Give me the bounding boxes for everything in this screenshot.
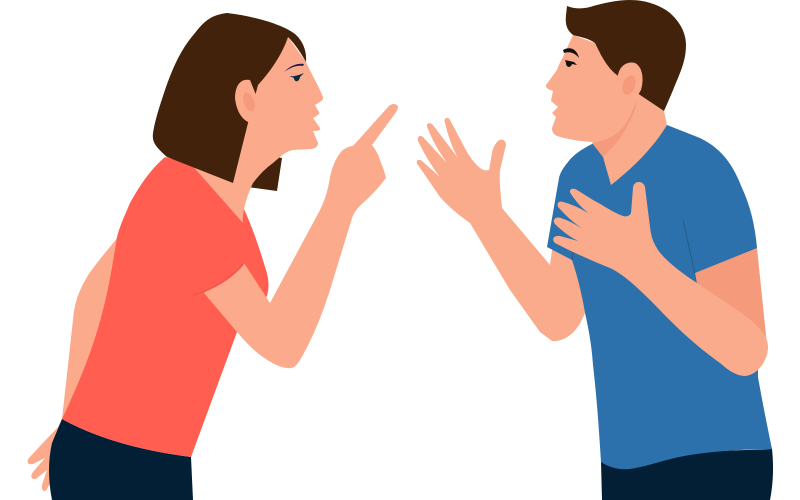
man raised arm and open hand <box>417 118 585 341</box>
woman pointing arm and hand <box>204 104 398 368</box>
man shirt <box>547 125 772 469</box>
man trousers <box>601 449 773 500</box>
woman eye <box>289 73 304 81</box>
woman trousers <box>49 419 193 500</box>
man forearm and hand on chest <box>553 182 768 376</box>
man sleeve seam <box>572 220 697 283</box>
man eyebrow <box>563 48 579 58</box>
woman eyebrow <box>284 64 304 72</box>
woman ear <box>235 80 260 122</box>
man eye <box>565 60 577 67</box>
woman sleeve <box>165 231 244 295</box>
man upper arm <box>695 248 767 345</box>
figure: woman <box>28 13 398 500</box>
woman shirt <box>62 157 269 457</box>
man neck shadow <box>592 100 637 157</box>
woman inner ear <box>241 91 257 113</box>
man hair <box>566 0 686 111</box>
woman back arm and hand <box>28 237 118 491</box>
man inner ear <box>620 74 638 96</box>
woman hair <box>153 13 306 183</box>
man ear <box>616 62 643 106</box>
woman neck and face <box>190 37 323 223</box>
woman sleeve hem <box>193 263 244 295</box>
man neck and face <box>546 35 667 185</box>
figure: man <box>417 0 773 500</box>
woman hair behind neck <box>240 150 282 191</box>
